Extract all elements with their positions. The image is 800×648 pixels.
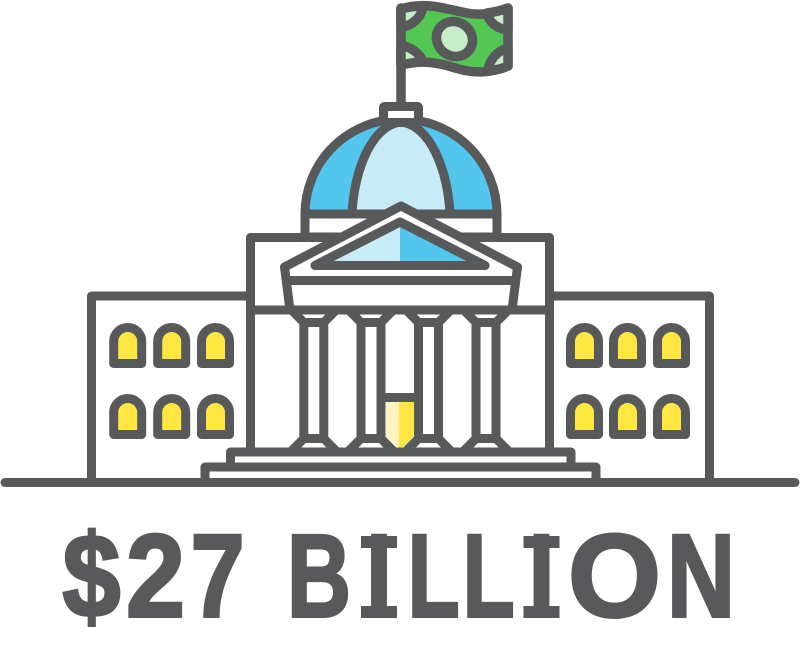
drum [305, 214, 497, 237]
window [158, 328, 186, 364]
entablature line [286, 276, 516, 285]
headline: $27 BILLION: I [528, 510, 554, 642]
window [614, 398, 642, 434]
headline: $27 BILLION: 7 [191, 510, 245, 642]
dome [305, 106, 497, 237]
headline: $27 BILLION: O [568, 510, 661, 642]
lintel [251, 306, 550, 314]
window [114, 328, 142, 364]
pediment inner triangle [315, 222, 485, 266]
window [158, 398, 186, 434]
left wing [92, 296, 251, 482]
banknote corners [401, 6, 508, 71]
window [658, 398, 686, 434]
columns [290, 311, 509, 452]
right wing [550, 296, 710, 482]
dome body [305, 119, 497, 214]
lantern cap [384, 106, 418, 122]
door bright half [399, 402, 414, 449]
ground line [5, 478, 795, 487]
headline: $27 BILLION: L [408, 510, 460, 642]
headline: $27 BILLION: B [287, 510, 351, 642]
headline: $27 BILLION: 2 [126, 510, 185, 642]
pediment outer frame [284, 206, 518, 310]
window [658, 328, 686, 364]
lower step [205, 467, 596, 482]
door light half [386, 402, 399, 449]
headline: $27 BILLION [62, 510, 735, 642]
pediment [251, 206, 550, 310]
flag pole [396, 8, 406, 106]
flag banknote [401, 6, 508, 72]
icon: money flag [401, 6, 508, 106]
door [385, 398, 415, 449]
headline: $27 BILLION: I [366, 510, 392, 642]
headline: $27 BILLION: $ [62, 510, 120, 642]
window [114, 398, 142, 434]
dome centre lobe [352, 122, 450, 214]
steps [205, 452, 596, 482]
window [570, 328, 598, 364]
left wing windows [114, 328, 230, 434]
column 4 [463, 311, 509, 452]
wings and main building [92, 238, 710, 482]
column 1 [290, 311, 337, 452]
headline: $27 BILLION: L [463, 510, 515, 642]
window [570, 398, 598, 434]
headline: $27 BILLION: N [667, 510, 735, 642]
right wing windows [570, 328, 686, 434]
banknote centre medallion [430, 14, 479, 64]
window [202, 328, 230, 364]
upper step [230, 452, 571, 467]
window [614, 328, 642, 364]
column 2 [348, 311, 394, 452]
main block [250, 238, 550, 452]
window [202, 398, 230, 434]
column 3 [405, 311, 452, 452]
door lintel [385, 393, 415, 402]
